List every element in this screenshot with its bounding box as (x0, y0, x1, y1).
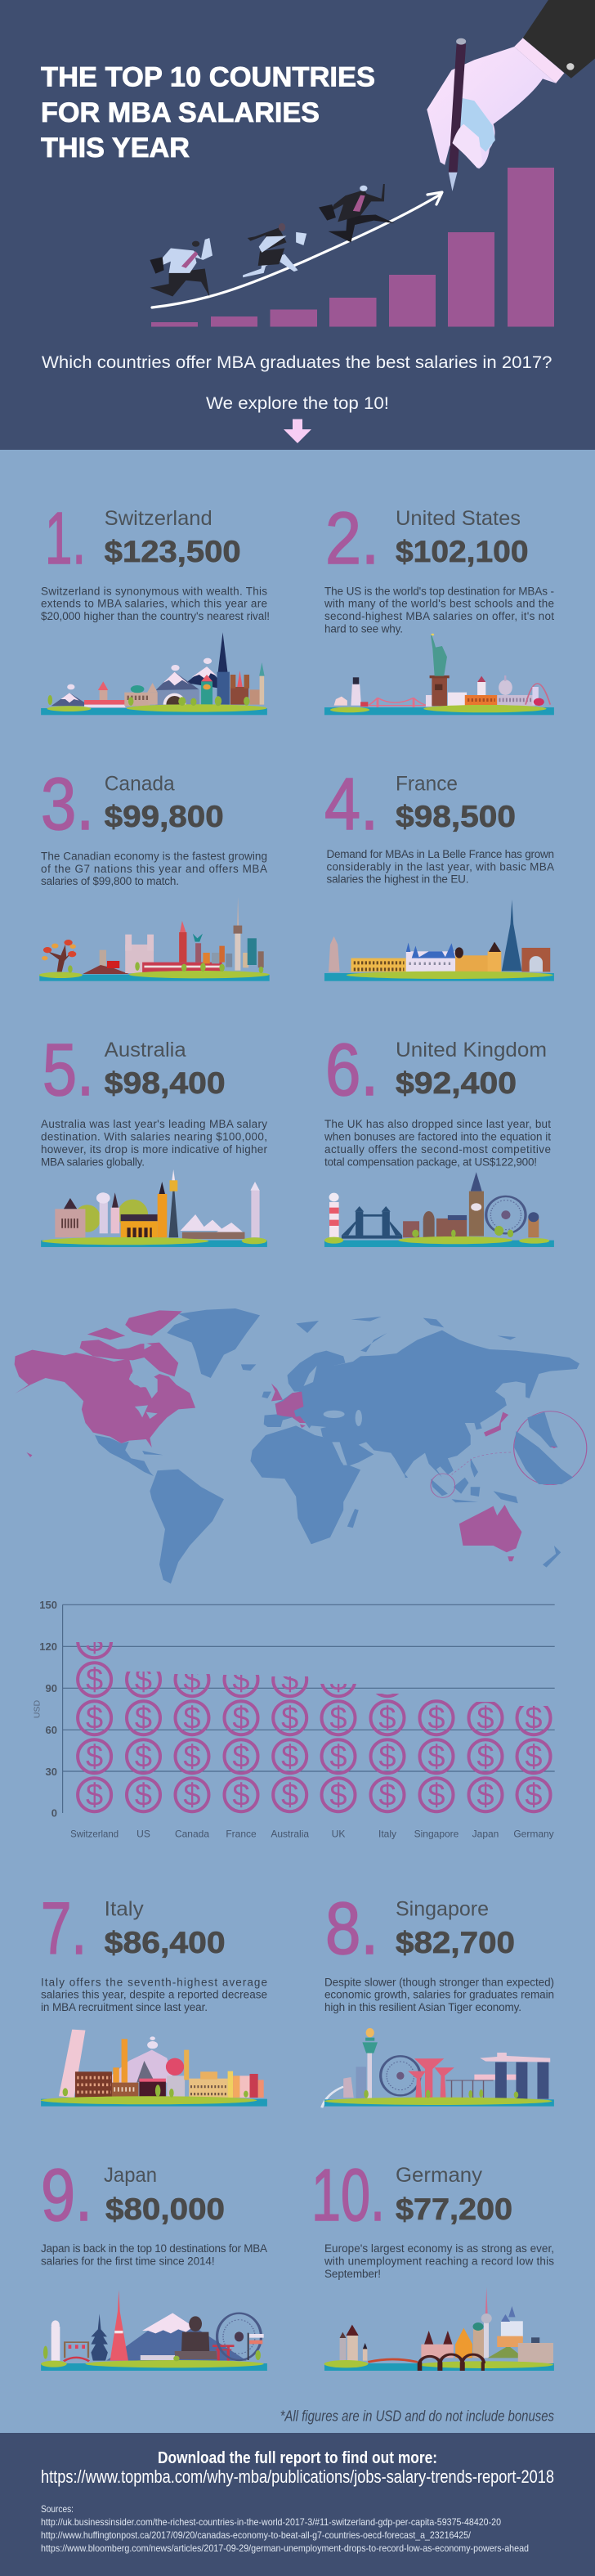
salary: $102,100 (396, 535, 528, 568)
panel: Switzerland (41, 498, 270, 715)
coin column: Australia: $ (281, 1702, 298, 1736)
country name: Germany (396, 2164, 483, 2187)
coin column: Italy (369, 1694, 405, 1814)
rank number: 1. (45, 498, 86, 580)
description (41, 1976, 267, 2013)
world map (15, 1308, 587, 1584)
sources: http://www.huffingtonpost.ca/2017/09/20/canadas-economy-to-beat-all-g7-countries-oecd-forecast_a_23216425/ (41, 2529, 472, 2541)
salary: $92,400 (396, 1066, 517, 1100)
description: Australia was last year's leading MBA salary (41, 1118, 267, 1130)
rank number: 2. (325, 498, 379, 580)
description: in MBA recruitment since last year. (41, 2001, 208, 2013)
coin column: Australia (273, 1663, 306, 1813)
y-axis labels: 120 (39, 1640, 57, 1653)
arrow: rising curve (152, 192, 442, 307)
chart gridlines (63, 1604, 555, 1813)
salary: $82,700 (396, 1926, 515, 1959)
rank number: 4. (324, 764, 378, 846)
salary: $99,800 (105, 800, 224, 833)
rank number: 6. (325, 1030, 378, 1111)
coin column: Switzerland: $ (86, 1740, 103, 1775)
panel: footer (0, 2433, 595, 2576)
rank number: 10. (311, 2155, 385, 2237)
y-axis labels: 60 (46, 1724, 57, 1736)
intro line: We explore the top 10! (206, 394, 389, 413)
description (327, 848, 554, 886)
coin column: Canada: $ (183, 1740, 201, 1775)
coin column: Switzerland (78, 1624, 111, 1813)
y-axis labels: 30 (46, 1766, 57, 1778)
intro question: Which countries offer MBA graduates the best salaries in 2017? (42, 353, 552, 372)
sources (41, 2503, 529, 2554)
salary: $77,200 (396, 2192, 512, 2226)
description: extends to MBA salaries, which this year are (41, 598, 267, 610)
y-axis labels: 0 (51, 1807, 57, 1819)
salary: $98,400 (105, 1066, 226, 1100)
skyline: Singapore (322, 2028, 554, 2107)
call to action: Download the full report to find out more: (158, 2449, 437, 2467)
skyline: Germany (324, 2287, 554, 2371)
description: when bonuses are factored into the equation it (324, 1131, 551, 1143)
x-axis labels: Australia (271, 1829, 309, 1840)
description (324, 1118, 551, 1168)
description: The UK has also dropped since last year, but (324, 1118, 551, 1130)
salary: $86,400 (105, 1926, 226, 1959)
rank number: 7. (41, 1888, 87, 1970)
description: salaries the highest in the EU. (327, 873, 469, 886)
coin column: Switzerland: $ (86, 1663, 103, 1698)
coin column: UK: $ (329, 1740, 347, 1775)
description: actually offers the second-most competitive (324, 1143, 551, 1156)
x-axis labels: Singapore (414, 1829, 459, 1840)
coin column: Singapore (420, 1701, 453, 1813)
coin column: Italy: $ (378, 1779, 396, 1813)
panel: Italy (41, 1888, 267, 2107)
map: sea cut-outs (303, 1366, 362, 1465)
country name: Australia (105, 1039, 186, 1061)
description: Switzerland is synonymous with wealth. This (41, 585, 267, 597)
coin column: Singapore: $ (427, 1779, 445, 1813)
y-axis title: USD (33, 1699, 42, 1718)
description: Despite slower (though stronger than expected) (324, 1976, 554, 1988)
description (324, 1976, 554, 2013)
coin column: Italy: $ (378, 1702, 396, 1736)
y-axis labels (39, 1599, 57, 1819)
icon: hand holding pencil (427, 0, 595, 191)
coin column: UK (322, 1663, 355, 1813)
description: second-highest MBA salaries on offer, it's not (324, 610, 554, 622)
skyline: Japan (41, 2290, 267, 2371)
coin column: Japan: $ (476, 1779, 494, 1813)
x-axis labels: Switzerland (70, 1829, 119, 1840)
coin column: US (127, 1663, 160, 1813)
coin column: Japan: $ (476, 1702, 494, 1736)
map: highlighted countries (15, 1310, 521, 1561)
rank number: 3. (41, 764, 94, 846)
country name: United Kingdom (396, 1039, 547, 1061)
description: $20,000 higher than the country's nearest rival! (41, 610, 270, 622)
salary: $98,500 (396, 800, 516, 833)
coin column: UK: $ (329, 1702, 347, 1736)
country name: Switzerland (105, 507, 212, 530)
x-axis labels (70, 1829, 554, 1840)
x-axis labels: France (226, 1829, 257, 1840)
description: salaries this year, despite a reported decrease (41, 1989, 267, 2001)
coin column: Switzerland: $ (86, 1625, 103, 1659)
coin column: Switzerland: $ (86, 1779, 103, 1813)
country name: Italy (105, 1898, 144, 1921)
salary: $123,500 (105, 535, 241, 568)
coin column: Germany: $ (525, 1779, 543, 1813)
arrow: down (284, 419, 311, 443)
country name: Singapore (396, 1898, 489, 1921)
description (41, 2242, 267, 2267)
coin column: Australia: $ (281, 1779, 298, 1813)
map: North American lakes and bays (114, 1341, 158, 1419)
panel: United Kingdom (324, 1030, 554, 1247)
description: Italy offers the seventh-highest average (41, 1976, 267, 1988)
coin column: France: $ (232, 1663, 250, 1698)
title: FOR MBA SALARIES (41, 97, 320, 128)
description: The Canadian economy is the fastest growing (41, 850, 267, 863)
description (41, 585, 270, 622)
sources: Sources: (41, 2503, 74, 2515)
coin column: Singapore: $ (427, 1702, 445, 1736)
title: THE TOP 10 COUNTRIES (41, 62, 375, 93)
description: considerably in the last year, with basic MBA (327, 860, 554, 873)
x-axis labels: Japan (472, 1829, 499, 1840)
panel: Canada (39, 764, 270, 981)
description: high in this resilient Asian Tiger economy. (324, 2001, 521, 2013)
rank number: 8. (325, 1888, 378, 1970)
coin column: Australia: $ (281, 1663, 298, 1698)
chart: average salary by country (33, 1599, 555, 1840)
title (41, 62, 375, 164)
skyline: Australia (41, 1169, 267, 1247)
skyline: Canada (39, 897, 270, 981)
coin column: Canada: $ (183, 1663, 201, 1698)
coin column: Canada: $ (183, 1702, 201, 1736)
coin column: Italy: $ (378, 1740, 396, 1775)
description (41, 850, 267, 887)
panel: header (0, 0, 595, 450)
sources: https://www.bloomberg.com/news/articles/2017-09-29/german-unemployment-drops-to-record-low-as-economy-powers-ahead (41, 2542, 529, 2554)
coin column: France: $ (232, 1702, 250, 1736)
coin column: US: $ (135, 1702, 152, 1736)
description (41, 1118, 268, 1168)
salary: $80,000 (105, 2192, 225, 2226)
x-axis labels: Italy (378, 1829, 396, 1840)
skyline: Switzerland (41, 632, 267, 715)
description (324, 2242, 554, 2280)
coin column: UK: $ (329, 1663, 347, 1698)
coin column: Singapore: $ (427, 1740, 445, 1775)
description: total compensation package, at US$122,900! (324, 1156, 537, 1168)
x-axis labels: US (136, 1829, 150, 1840)
description: The US is the world's top destination for MBAs - (324, 585, 554, 597)
description: with unemployment reaching a record low this (324, 2255, 554, 2267)
description: salaries of $99,800 to match. (41, 875, 179, 887)
description: MBA salaries globally. (41, 1156, 145, 1168)
sources: http://uk.businessinsider.com/the-richest-countries-in-the-world-2017-3/#11-switzerland-gdp-per-capita-59375-48420-20 (41, 2516, 501, 2528)
description: Demand for MBAs in La Belle France has grown (327, 848, 554, 860)
description: Japan is back in the top 10 destinations for MBA (41, 2242, 267, 2255)
panel: United States (324, 498, 554, 715)
icon: runner two (243, 223, 306, 277)
description: hard to see why. (324, 622, 403, 635)
icon: runner one (150, 238, 212, 296)
rank number: 9. (41, 2155, 92, 2237)
rank number: 5. (42, 1030, 94, 1111)
coin column: Germany: $ (525, 1740, 543, 1775)
skyline: France (324, 900, 554, 981)
description: Europe's largest economy is as strong as ever, (324, 2242, 554, 2255)
coin column: Japan (469, 1701, 502, 1813)
panel: France (324, 764, 554, 981)
description: of the G7 nations this year and offers MBA (41, 863, 267, 875)
description: destination. With salaries nearing $100,000, (41, 1131, 267, 1143)
icon: running business people (150, 184, 395, 296)
country name: Japan (104, 2164, 157, 2187)
x-axis labels: Canada (175, 1829, 209, 1840)
bar chart: rising bars (151, 168, 554, 327)
coin column: Australia: $ (281, 1740, 298, 1775)
coin column: France: $ (232, 1740, 250, 1775)
coin column: Japan: $ (476, 1740, 494, 1775)
coin column: Germany (517, 1701, 551, 1813)
coin column: France (224, 1663, 258, 1813)
coin column: US: $ (135, 1779, 152, 1813)
coin column: Canada: $ (183, 1779, 201, 1813)
map: Singapore inset callout (431, 1411, 587, 1497)
coin column: Switzerland: $ (86, 1702, 103, 1736)
x-axis labels: UK (332, 1829, 345, 1840)
panel: Australia (41, 1030, 268, 1247)
map: unhighlighted land (95, 1308, 579, 1584)
y-axis labels: 90 (46, 1682, 57, 1694)
coin column: France: $ (232, 1779, 250, 1813)
description (324, 585, 554, 635)
coin column: Germany: $ (525, 1702, 543, 1736)
skyline: United Kingdom (324, 1172, 554, 1247)
panel: Singapore (322, 1888, 554, 2107)
coin column: Canada (175, 1663, 209, 1813)
coin column: US: $ (135, 1740, 152, 1775)
y-axis labels: 150 (39, 1599, 57, 1611)
country name: United States (396, 507, 521, 530)
skyline: Italy (41, 2030, 267, 2107)
skyline: United States (324, 634, 554, 715)
x-axis labels: Germany (513, 1829, 554, 1840)
panel: Japan (41, 2155, 267, 2371)
title: THIS YEAR (41, 132, 190, 164)
description: with many of the world's best schools and the (324, 598, 554, 610)
icon: runner three (319, 184, 395, 242)
country name: France (396, 773, 458, 796)
coin column: US: $ (135, 1663, 152, 1698)
description: salaries for the first time since 2014! (41, 2255, 215, 2267)
panel: Germany (311, 2155, 554, 2371)
description: September! (324, 2268, 381, 2280)
description: economic growth, salaries for graduates remain (324, 1989, 554, 2001)
country name: Canada (105, 773, 175, 796)
coin column: UK: $ (329, 1779, 347, 1813)
description: however, its drop is more indicative of higher (41, 1143, 268, 1156)
